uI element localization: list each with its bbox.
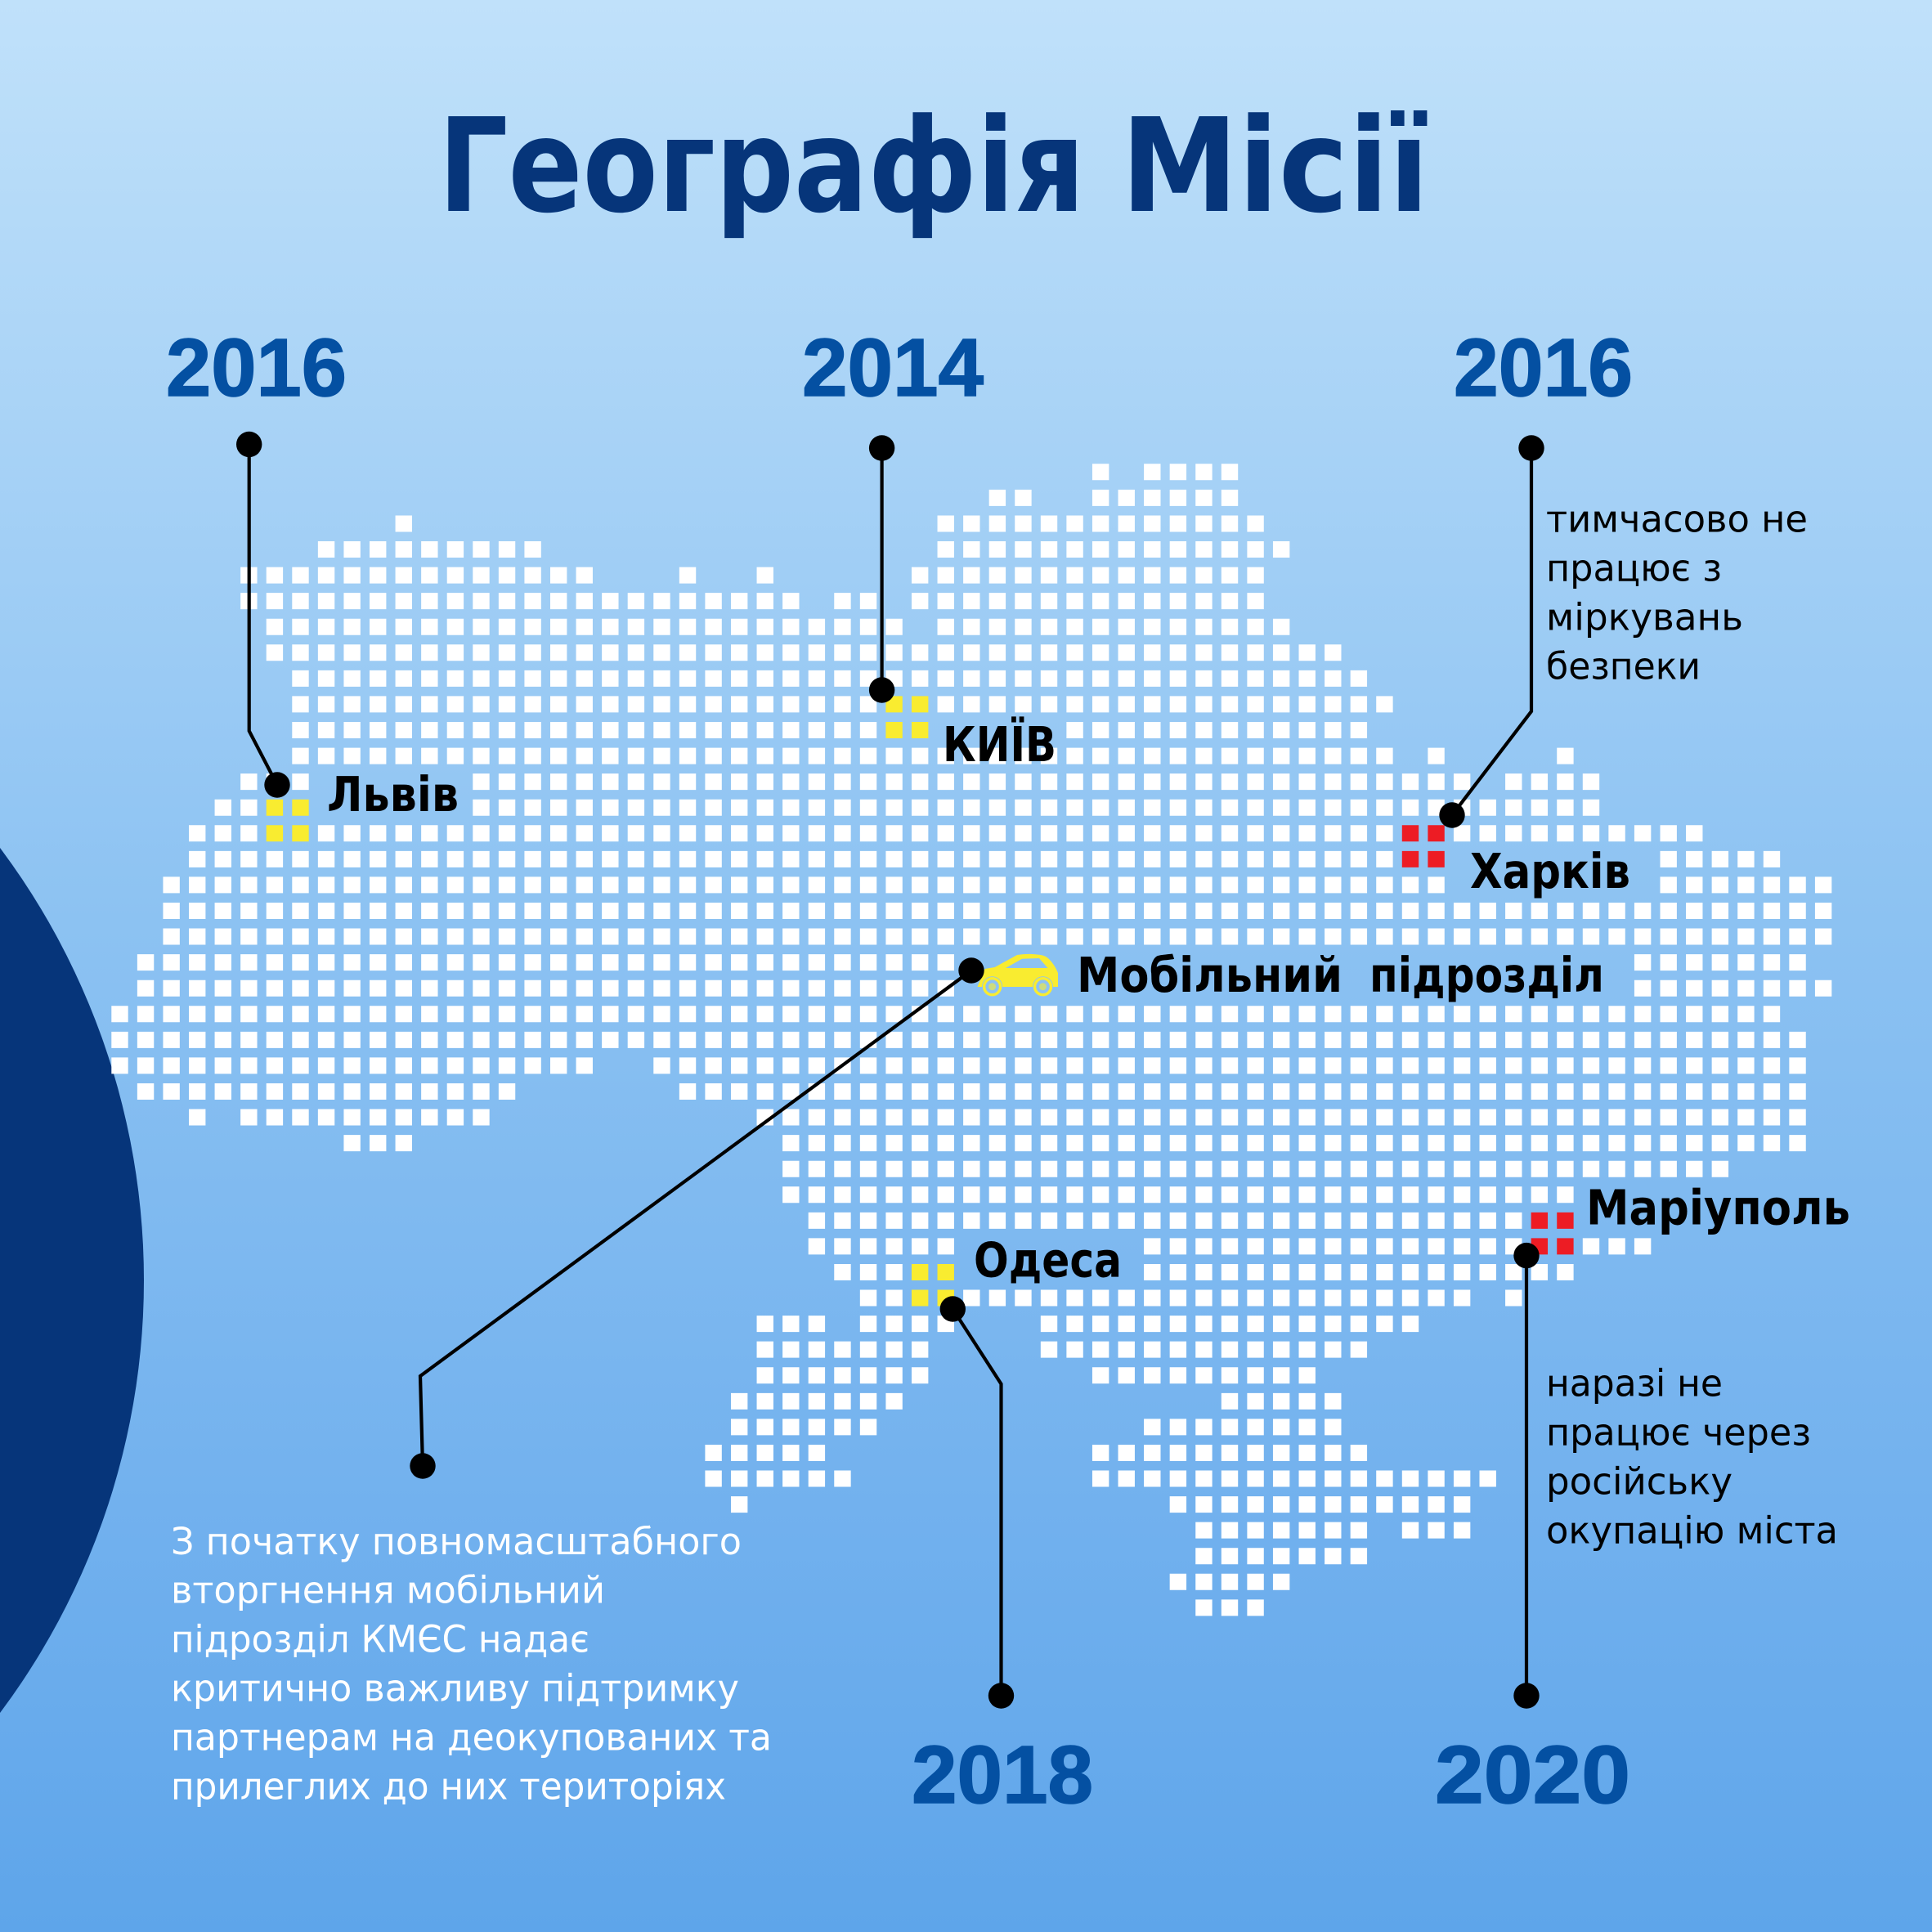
callout: Kyiv connector bbox=[869, 435, 894, 703]
unit label: mobile unit: Мобільний bbox=[1077, 947, 1343, 1003]
unit label: mobile unit: підрозділ bbox=[1369, 947, 1604, 1003]
callout: Kharkiv connector bbox=[1439, 435, 1544, 828]
note: Kharkiv status: міркувань bbox=[1546, 596, 1743, 639]
dark navy circle at left edge bbox=[0, 558, 144, 1932]
unit label: mobile unit bbox=[1077, 947, 1604, 1003]
year: Kyiv 2014: 2014 bbox=[802, 322, 984, 414]
year: Odesa 2018: 2018 bbox=[912, 1729, 1093, 1821]
callout: Mariupol connector bbox=[1513, 1243, 1540, 1709]
city label: Odesa: Одеса bbox=[974, 1232, 1122, 1289]
text block: mobile unit description: З початку повномасштабного bbox=[171, 1520, 742, 1563]
text block: mobile unit description bbox=[171, 1520, 772, 1809]
pixel map of Ukraine bbox=[111, 472, 1831, 1607]
note: Kharkiv status: тимчасово не bbox=[1546, 498, 1808, 541]
white map squares bbox=[111, 472, 1831, 1607]
note: Kharkiv status: працює з bbox=[1546, 547, 1722, 590]
city label: Mariupol: Маріуполь bbox=[1586, 1180, 1850, 1236]
yellow markers: active offices bbox=[267, 704, 954, 1298]
callout: Lviv connector bbox=[236, 432, 290, 798]
year: Lviv 2016: 2016 bbox=[166, 322, 347, 414]
text block: mobile unit description: підрозділ КМЄС надає bbox=[171, 1618, 589, 1661]
city label: Kharkiv: Харків bbox=[1470, 843, 1630, 899]
note: Mariupol status: працює через bbox=[1546, 1410, 1811, 1454]
city label: Lviv: Львів bbox=[327, 766, 459, 823]
icon: yellow car bbox=[978, 954, 1058, 997]
year: Kharkiv 2016: 2016 bbox=[1454, 322, 1633, 414]
note: Kharkiv status bbox=[1546, 498, 1808, 688]
note: Mariupol status bbox=[1546, 1361, 1838, 1552]
note: Kharkiv status: безпеки bbox=[1546, 645, 1701, 688]
year: Mariupol 2020: 2020 bbox=[1435, 1729, 1630, 1821]
title: Місії bbox=[1121, 91, 1429, 242]
text block: mobile unit description: критично важливу підтримку bbox=[171, 1667, 739, 1710]
note: Mariupol status: наразі не bbox=[1546, 1361, 1723, 1405]
city label: Kyiv: КИЇВ bbox=[943, 716, 1056, 773]
callout: mobile unit connector bbox=[410, 957, 984, 1479]
text block: mobile unit description: прилеглих до них територіях bbox=[171, 1765, 726, 1809]
note: Mariupol status: російську bbox=[1546, 1459, 1733, 1503]
red markers: suspended offices bbox=[1402, 833, 1574, 1246]
text block: mobile unit description: вторгнення мобільний bbox=[171, 1569, 605, 1612]
callout: Odesa connector bbox=[940, 1296, 1014, 1709]
text block: mobile unit description: партнерам на деокупованих та bbox=[171, 1716, 772, 1759]
title: Географія bbox=[438, 91, 1085, 242]
note: Mariupol status: окупацію міста bbox=[1546, 1508, 1838, 1552]
